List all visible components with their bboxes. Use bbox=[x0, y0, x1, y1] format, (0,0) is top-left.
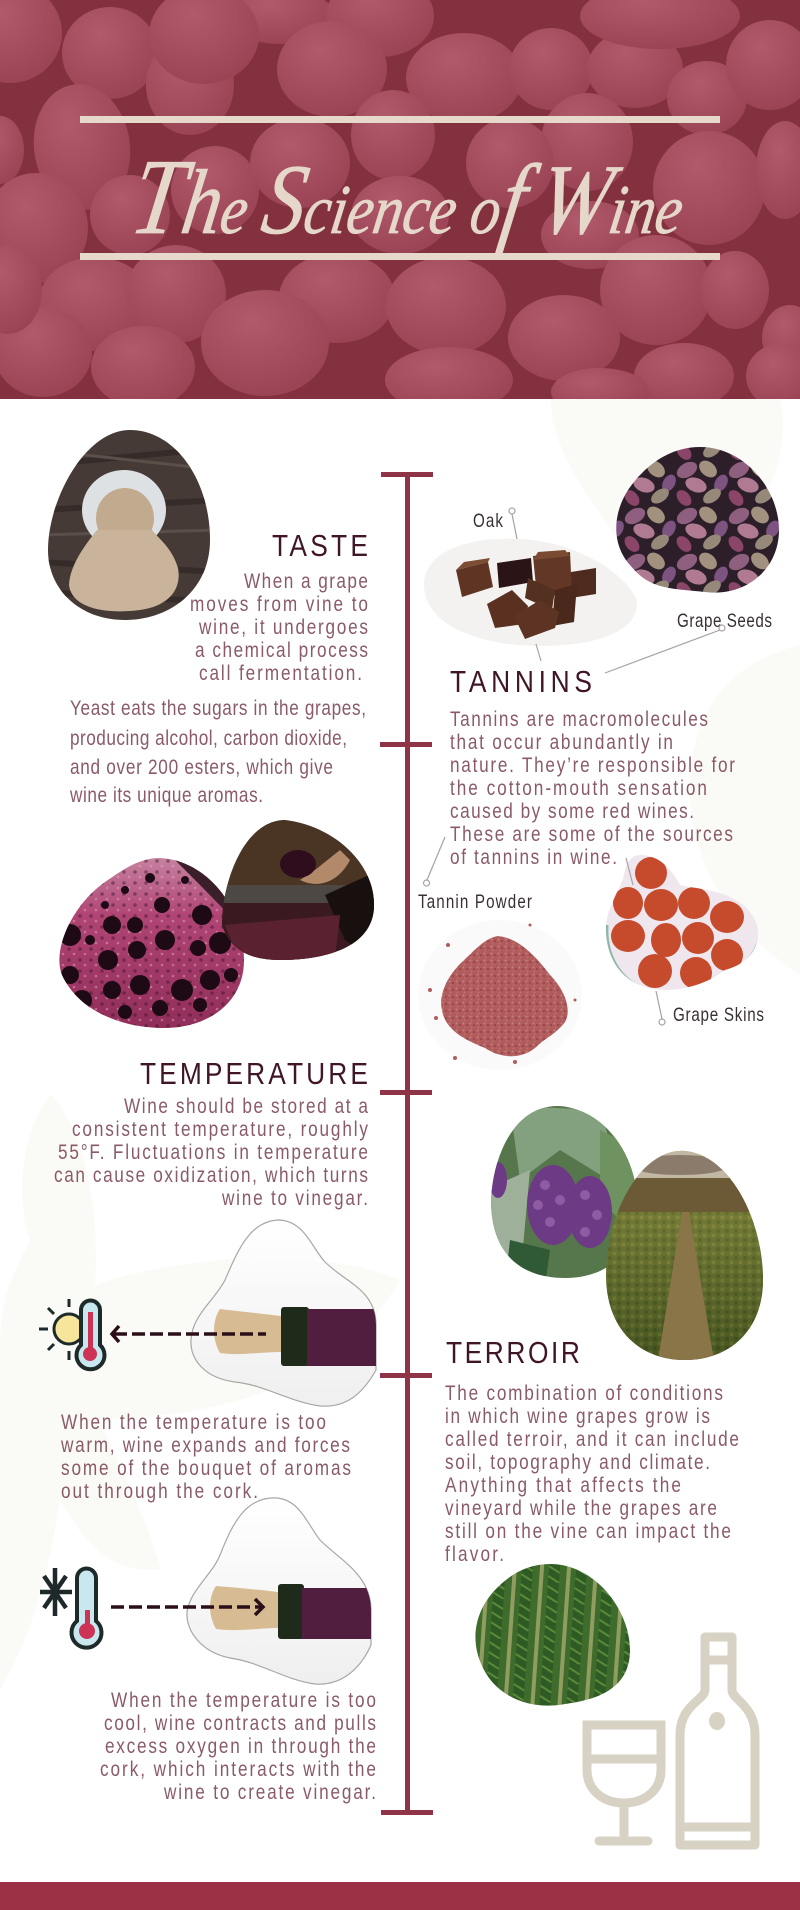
timeline bbox=[380, 472, 433, 1815]
text: terroir: soil, topography and climate. bbox=[445, 1450, 710, 1475]
text: tannins: Tannins are macromolecules bbox=[450, 707, 708, 732]
label: Tannin Powder bbox=[418, 837, 532, 912]
text: tannins: of tannins in wine. bbox=[450, 845, 617, 870]
heading: Tannins: TANNINS bbox=[450, 665, 592, 700]
text: yeast bbox=[69, 696, 366, 808]
background leaf: right bbox=[690, 645, 800, 975]
header banner: grape photo bbox=[0, 0, 800, 416]
icon: wine bottle bbox=[680, 1637, 755, 1845]
title rule: bottom bbox=[80, 253, 720, 260]
photo: oak cubes bbox=[424, 539, 637, 646]
text: tannins: the cotton-mouth sensation bbox=[450, 776, 707, 801]
text: cool: excess oxygen in through the bbox=[105, 1734, 376, 1759]
photo: vineyard rows bbox=[606, 1150, 763, 1360]
label: Grape Skins: Grape Skins bbox=[673, 1003, 764, 1025]
connector: grape skins bbox=[626, 858, 665, 1025]
text: terroir: still on the vine can impact the bbox=[445, 1519, 731, 1544]
photo: grape seeds bbox=[616, 447, 779, 593]
text: temperature: 55°F. Fluctuations in temperature bbox=[58, 1140, 368, 1165]
heading: Terroir: TERROIR bbox=[446, 1336, 580, 1371]
text: yeast: producing alcohol, carbon dioxide, bbox=[70, 726, 347, 751]
heading: Taste: TASTE bbox=[272, 529, 368, 564]
text: taste intro bbox=[190, 569, 368, 686]
text: warm: When the temperature is too bbox=[61, 1410, 326, 1435]
text: terroir bbox=[445, 1381, 739, 1567]
text: terroir: called terroir, and it can include bbox=[445, 1427, 739, 1452]
text: yeast: and over 200 esters, which give bbox=[70, 755, 333, 780]
text: taste intro: wine, it undergoes bbox=[198, 615, 368, 640]
photo: grape skins bbox=[606, 855, 758, 990]
text: cool: cork, which interacts with the bbox=[100, 1757, 376, 1782]
title rule: top bbox=[80, 116, 720, 123]
text: cool bbox=[100, 1688, 376, 1805]
text: terroir: flavor. bbox=[445, 1542, 504, 1567]
icon: arrow left bbox=[112, 1326, 266, 1342]
text: warm: out through the cork. bbox=[61, 1479, 258, 1504]
text: cool: wine to create vinegar. bbox=[163, 1780, 376, 1805]
label: Oak bbox=[473, 508, 541, 661]
background leaf: left cluster bbox=[0, 1095, 400, 1690]
label: Grape Seeds: Grape Seeds bbox=[677, 609, 772, 631]
photo: hands with crushed grapes bbox=[222, 820, 374, 960]
text: warm: warm, wine expands and forces bbox=[60, 1433, 350, 1458]
text: taste intro: call fermentation. bbox=[199, 661, 362, 686]
text: terroir: The combination of conditions bbox=[445, 1381, 723, 1406]
background leaf: top right bbox=[551, 399, 783, 585]
text: cool: cool, wine contracts and pulls bbox=[104, 1711, 376, 1736]
text: tannins: that occur abundantly in bbox=[450, 730, 673, 755]
label: Tannin Powder: Tannin Powder bbox=[418, 890, 532, 912]
photo: bubbling wine bbox=[59, 858, 244, 1028]
text: temperature: Wine should be stored at a bbox=[124, 1094, 368, 1119]
text: tannins: These are some of the sources bbox=[450, 822, 733, 847]
footer band bbox=[0, 1882, 800, 1910]
title: The Science of Wine bbox=[124, 137, 694, 257]
icon: hot thermometer bbox=[39, 1299, 104, 1369]
photo: aerial vineyard bbox=[475, 1564, 630, 1706]
label: Grape Seeds bbox=[605, 609, 772, 673]
text: tannins: nature. They’re responsible for bbox=[450, 753, 735, 778]
text: warm bbox=[60, 1410, 351, 1504]
text: tannins: caused by some red wines. bbox=[450, 799, 694, 824]
cork diagram: warm bbox=[191, 1220, 376, 1406]
text: temperature bbox=[54, 1094, 368, 1211]
icon: cold thermometer bbox=[40, 1568, 102, 1648]
icon: wine glass bbox=[587, 1725, 661, 1841]
photo: yeast spilled from cup bbox=[48, 430, 210, 620]
text: temperature: can cause oxidization, which turns bbox=[54, 1163, 368, 1188]
cork diagram: cool bbox=[187, 1498, 371, 1684]
text: taste intro: moves from vine to bbox=[190, 592, 368, 617]
icon: arrow right bbox=[111, 1599, 263, 1615]
text: temperature: wine to vinegar. bbox=[221, 1186, 368, 1211]
text: taste intro: When a grape bbox=[244, 569, 368, 594]
heading: Temperature: TEMPERATURE bbox=[140, 1057, 368, 1092]
photo: tannin powder bbox=[418, 920, 582, 1070]
text: terroir: vineyard while the grapes are bbox=[445, 1496, 717, 1521]
label: Oak: Oak bbox=[473, 509, 503, 531]
text: warm: some of the bouquet of aromas bbox=[61, 1456, 351, 1481]
text: taste intro: a chemical process bbox=[195, 638, 368, 663]
text: tannins bbox=[450, 707, 735, 870]
text: yeast: wine its unique aromas. bbox=[69, 783, 263, 808]
text: temperature: consistent temperature, roughly bbox=[72, 1117, 368, 1142]
text: terroir: Anything that affects the bbox=[445, 1473, 681, 1498]
text: terroir: in which wine grapes grow is bbox=[445, 1404, 710, 1429]
text: yeast: Yeast eats the sugars in the grapes, bbox=[70, 696, 366, 721]
photo: grape cluster on vine bbox=[491, 1106, 635, 1278]
text: cool: When the temperature is too bbox=[111, 1688, 376, 1713]
